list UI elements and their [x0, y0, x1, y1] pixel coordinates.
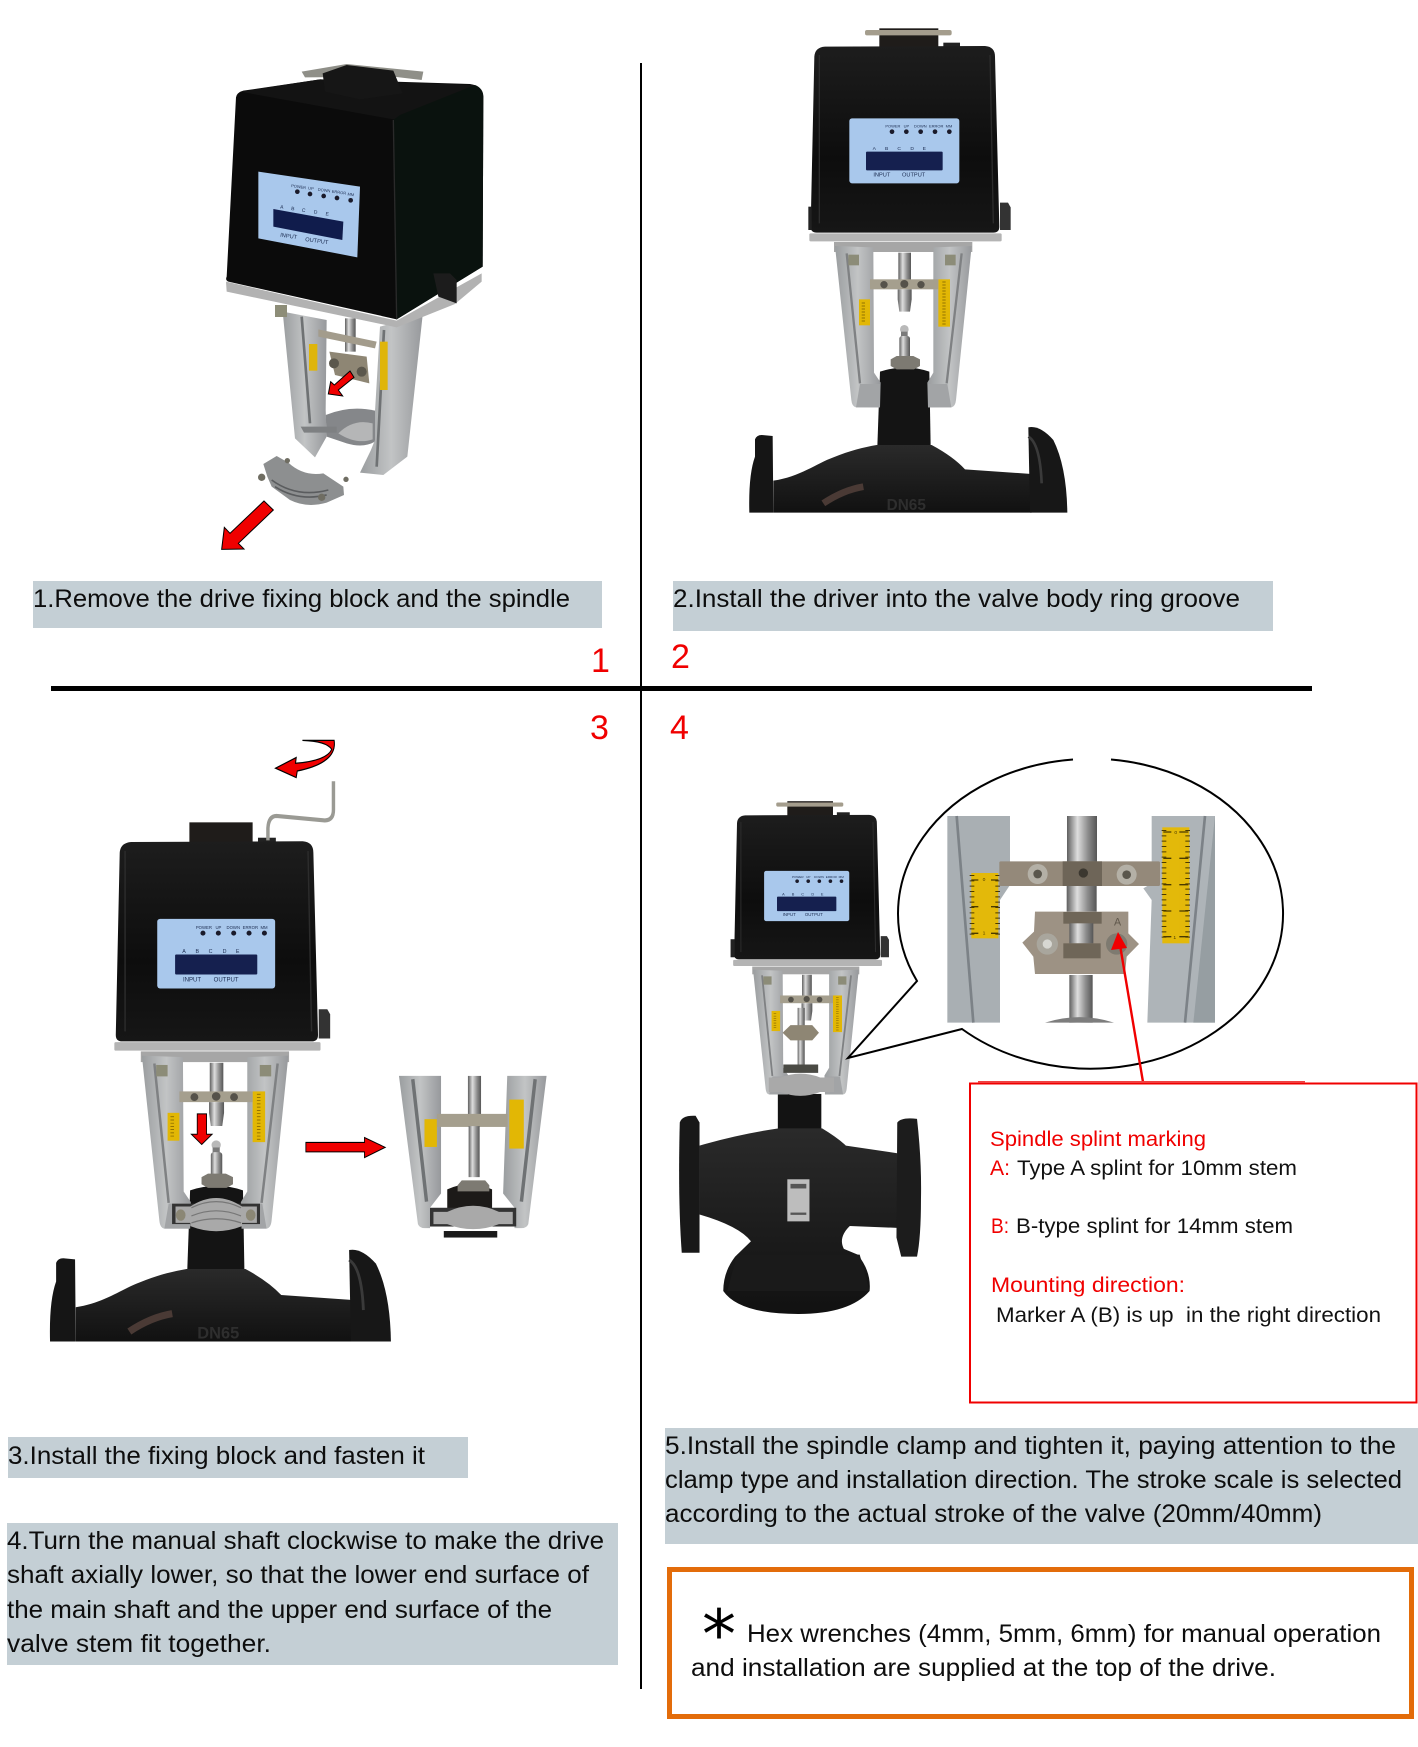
caption: step 5: according to the actual stroke of the valve (20mm/40mm)	[665, 1500, 1322, 1528]
scale numbers	[983, 830, 1177, 941]
caption: step 4: the main shaft and the upper end surface of the	[7, 1596, 552, 1624]
spindle with splint and clamp	[769, 1008, 834, 1096]
scale numbers: 0	[1174, 830, 1177, 836]
panel labels: POWER	[792, 875, 804, 879]
arrow: to detail	[306, 1138, 385, 1158]
panel labels: UP	[215, 925, 222, 930]
panel labels: E	[236, 949, 240, 955]
valve body	[749, 367, 1067, 513]
photo: step 4 complete valve	[679, 801, 921, 1314]
panel labels: A	[782, 891, 785, 896]
left side nub	[808, 207, 812, 230]
clamp, crank and arrows	[172, 740, 547, 1238]
callout magnifier bubble	[848, 760, 1283, 1069]
caption: step 4: 4.Turn the manual shaft clockwise to make the drive	[7, 1527, 604, 1555]
arrow: small red arrow	[328, 371, 354, 396]
display panel	[764, 871, 849, 921]
mounting direction heading: Mounting direction:	[991, 1274, 1185, 1297]
panel divider vertical line	[640, 63, 642, 1689]
display panel	[157, 919, 275, 988]
panel labels: OUTPUT	[805, 912, 823, 917]
detail photo: spindle engaged	[399, 1076, 547, 1238]
panel labels: INPUT	[783, 912, 796, 917]
photo: step 3 actuator with clamp and crank	[50, 740, 547, 1343]
panel labels: INPUT	[873, 173, 891, 179]
panel labels: E	[923, 146, 927, 152]
actuator housing	[226, 79, 483, 327]
panel labels: A	[280, 204, 285, 211]
panel labels: UP	[308, 185, 314, 191]
panel labels: B	[291, 206, 296, 213]
scale numbers: 1	[1173, 935, 1176, 941]
right yellow scale	[1162, 827, 1189, 943]
scale numbers: 1	[983, 931, 986, 937]
panel labels	[873, 124, 952, 179]
caption: step 4: shaft axially lower, so that the lower end surface of	[7, 1561, 589, 1589]
panel labels: INPUT	[183, 977, 201, 983]
type B line: B-type splint for 14mm stem	[1016, 1215, 1293, 1238]
panel labels: MM	[260, 925, 268, 930]
panel labels	[182, 925, 268, 983]
panel labels: POWER	[291, 183, 307, 190]
left bracket leg	[947, 816, 1010, 1023]
detail photo: splint close-up	[947, 816, 1215, 1023]
arrow: pointer to marking A	[1111, 932, 1143, 1082]
clamp bar	[999, 861, 1160, 886]
panel labels	[782, 875, 844, 917]
panel labels: A	[873, 146, 877, 152]
panel labels: POWER	[196, 925, 212, 930]
panel labels: ERROR	[929, 124, 944, 129]
panel labels: UP	[904, 124, 910, 129]
panel labels: A	[182, 949, 186, 955]
manual crank	[268, 781, 333, 840]
panel labels: D	[910, 146, 914, 152]
arrow: stem down	[191, 1114, 212, 1144]
mounting direction text: Marker A (B) is up in the right direction	[996, 1304, 1381, 1327]
display panel	[849, 118, 959, 183]
actuator	[731, 801, 889, 1095]
actuator	[809, 28, 1011, 407]
panel labels: E	[821, 891, 824, 896]
panel labels: D	[223, 949, 227, 955]
strap on actuator top	[776, 802, 843, 807]
caption: step 3: 3.Install the fixing block and fasten it	[8, 1442, 425, 1470]
fixing clamp	[172, 1198, 260, 1231]
panel labels: DOWN	[227, 925, 240, 930]
panel labels: OUTPUT	[305, 237, 329, 246]
type B line: B:	[991, 1215, 1009, 1238]
panel labels: B	[885, 146, 889, 152]
number 1: 1	[591, 642, 610, 680]
display panel	[258, 172, 360, 257]
panel labels: B	[792, 891, 795, 896]
caption: step 5: 5.Install the spindle clamp and tighten it, paying attention to the	[665, 1432, 1396, 1460]
right bracket leg	[1143, 816, 1215, 1023]
caption: step 2: 2.Install the driver into the valve body ring groove	[673, 585, 1240, 613]
panel labels: OUTPUT	[902, 173, 926, 179]
panel labels: UP	[806, 875, 810, 879]
removed fixing block	[258, 456, 349, 505]
valve shaft	[1045, 816, 1114, 1023]
spindle splint	[1022, 912, 1139, 974]
DN65 casting mark: DN65	[197, 1325, 239, 1343]
panel labels: D	[313, 209, 318, 216]
left side nub	[731, 939, 735, 957]
panel: spindle splint notes	[970, 1082, 1416, 1402]
actuator on valve	[50, 822, 391, 1343]
type A line: Type A splint for 10mm stem	[1017, 1157, 1297, 1180]
panel labels: C	[897, 146, 901, 152]
note box: hex wrenches: and installation are supplied at the top of the drive.	[691, 1654, 1276, 1682]
caption: step 2	[673, 581, 1273, 631]
panel labels: DOWN	[914, 124, 927, 129]
panel labels: C	[301, 208, 306, 214]
panel labels: E	[325, 211, 330, 218]
left yellow scale	[971, 873, 998, 938]
splint heading: Spindle splint marking	[990, 1128, 1206, 1151]
arrow: large red arrow	[222, 501, 273, 549]
panel labels: DOWN	[814, 875, 824, 879]
number 3: 3	[590, 709, 609, 747]
panel labels: INPUT	[280, 233, 298, 241]
panel labels: C	[209, 949, 213, 955]
spindle and splint	[318, 318, 377, 383]
panel labels: POWER	[885, 124, 901, 129]
photo: step 2 actuator placed on valve body	[749, 28, 1067, 514]
panel labels: OUTPUT	[214, 977, 239, 983]
note box: hex wrenches: Hex wrenches (4mm, 5mm, 6mm) for manual operation	[747, 1620, 1381, 1648]
panel labels	[280, 183, 354, 246]
panel labels: B	[195, 949, 199, 955]
caption: step 1: 1.Remove the drive fixing block and the spindle	[33, 585, 570, 613]
panel labels: D	[811, 891, 814, 896]
panel labels: MM	[946, 124, 952, 129]
panel labels: DOWN	[318, 187, 331, 193]
panel labels: MM	[839, 875, 844, 879]
caption: step 1	[33, 581, 602, 628]
caption: step 4	[7, 1523, 618, 1665]
caption: step 5: clamp type and installation direction. The stroke scale is selected	[665, 1466, 1402, 1494]
number 4: 4	[670, 709, 689, 747]
panel divider horizontal line	[51, 686, 1312, 691]
strap on actuator top	[865, 30, 952, 35]
handle on top of actuator	[302, 64, 423, 99]
caption: step 3	[8, 1437, 468, 1478]
number 2: 2	[671, 638, 690, 676]
panel labels: ERROR	[826, 875, 838, 879]
spindle splint: A	[1114, 916, 1122, 928]
photo: step 1 actuator with spindle removed	[222, 64, 483, 549]
caption: step 4: valve stem fit together.	[7, 1630, 271, 1658]
panel labels: C	[801, 891, 804, 896]
DN65 casting mark: DN65	[887, 497, 926, 514]
valve stem	[891, 325, 920, 369]
valve body	[679, 1094, 921, 1314]
panel labels: ERROR	[243, 925, 258, 930]
note box: hex wrenches	[670, 1570, 1412, 1716]
scale numbers: 0	[983, 877, 986, 883]
caption: step 5	[665, 1428, 1418, 1544]
type A line: A:	[990, 1157, 1010, 1180]
asterisk: *	[702, 1596, 736, 1675]
arrow: rotation	[276, 740, 334, 778]
actuator yoke	[275, 305, 423, 475]
panel labels: MM	[347, 191, 354, 197]
panel labels: ERROR	[332, 189, 347, 196]
